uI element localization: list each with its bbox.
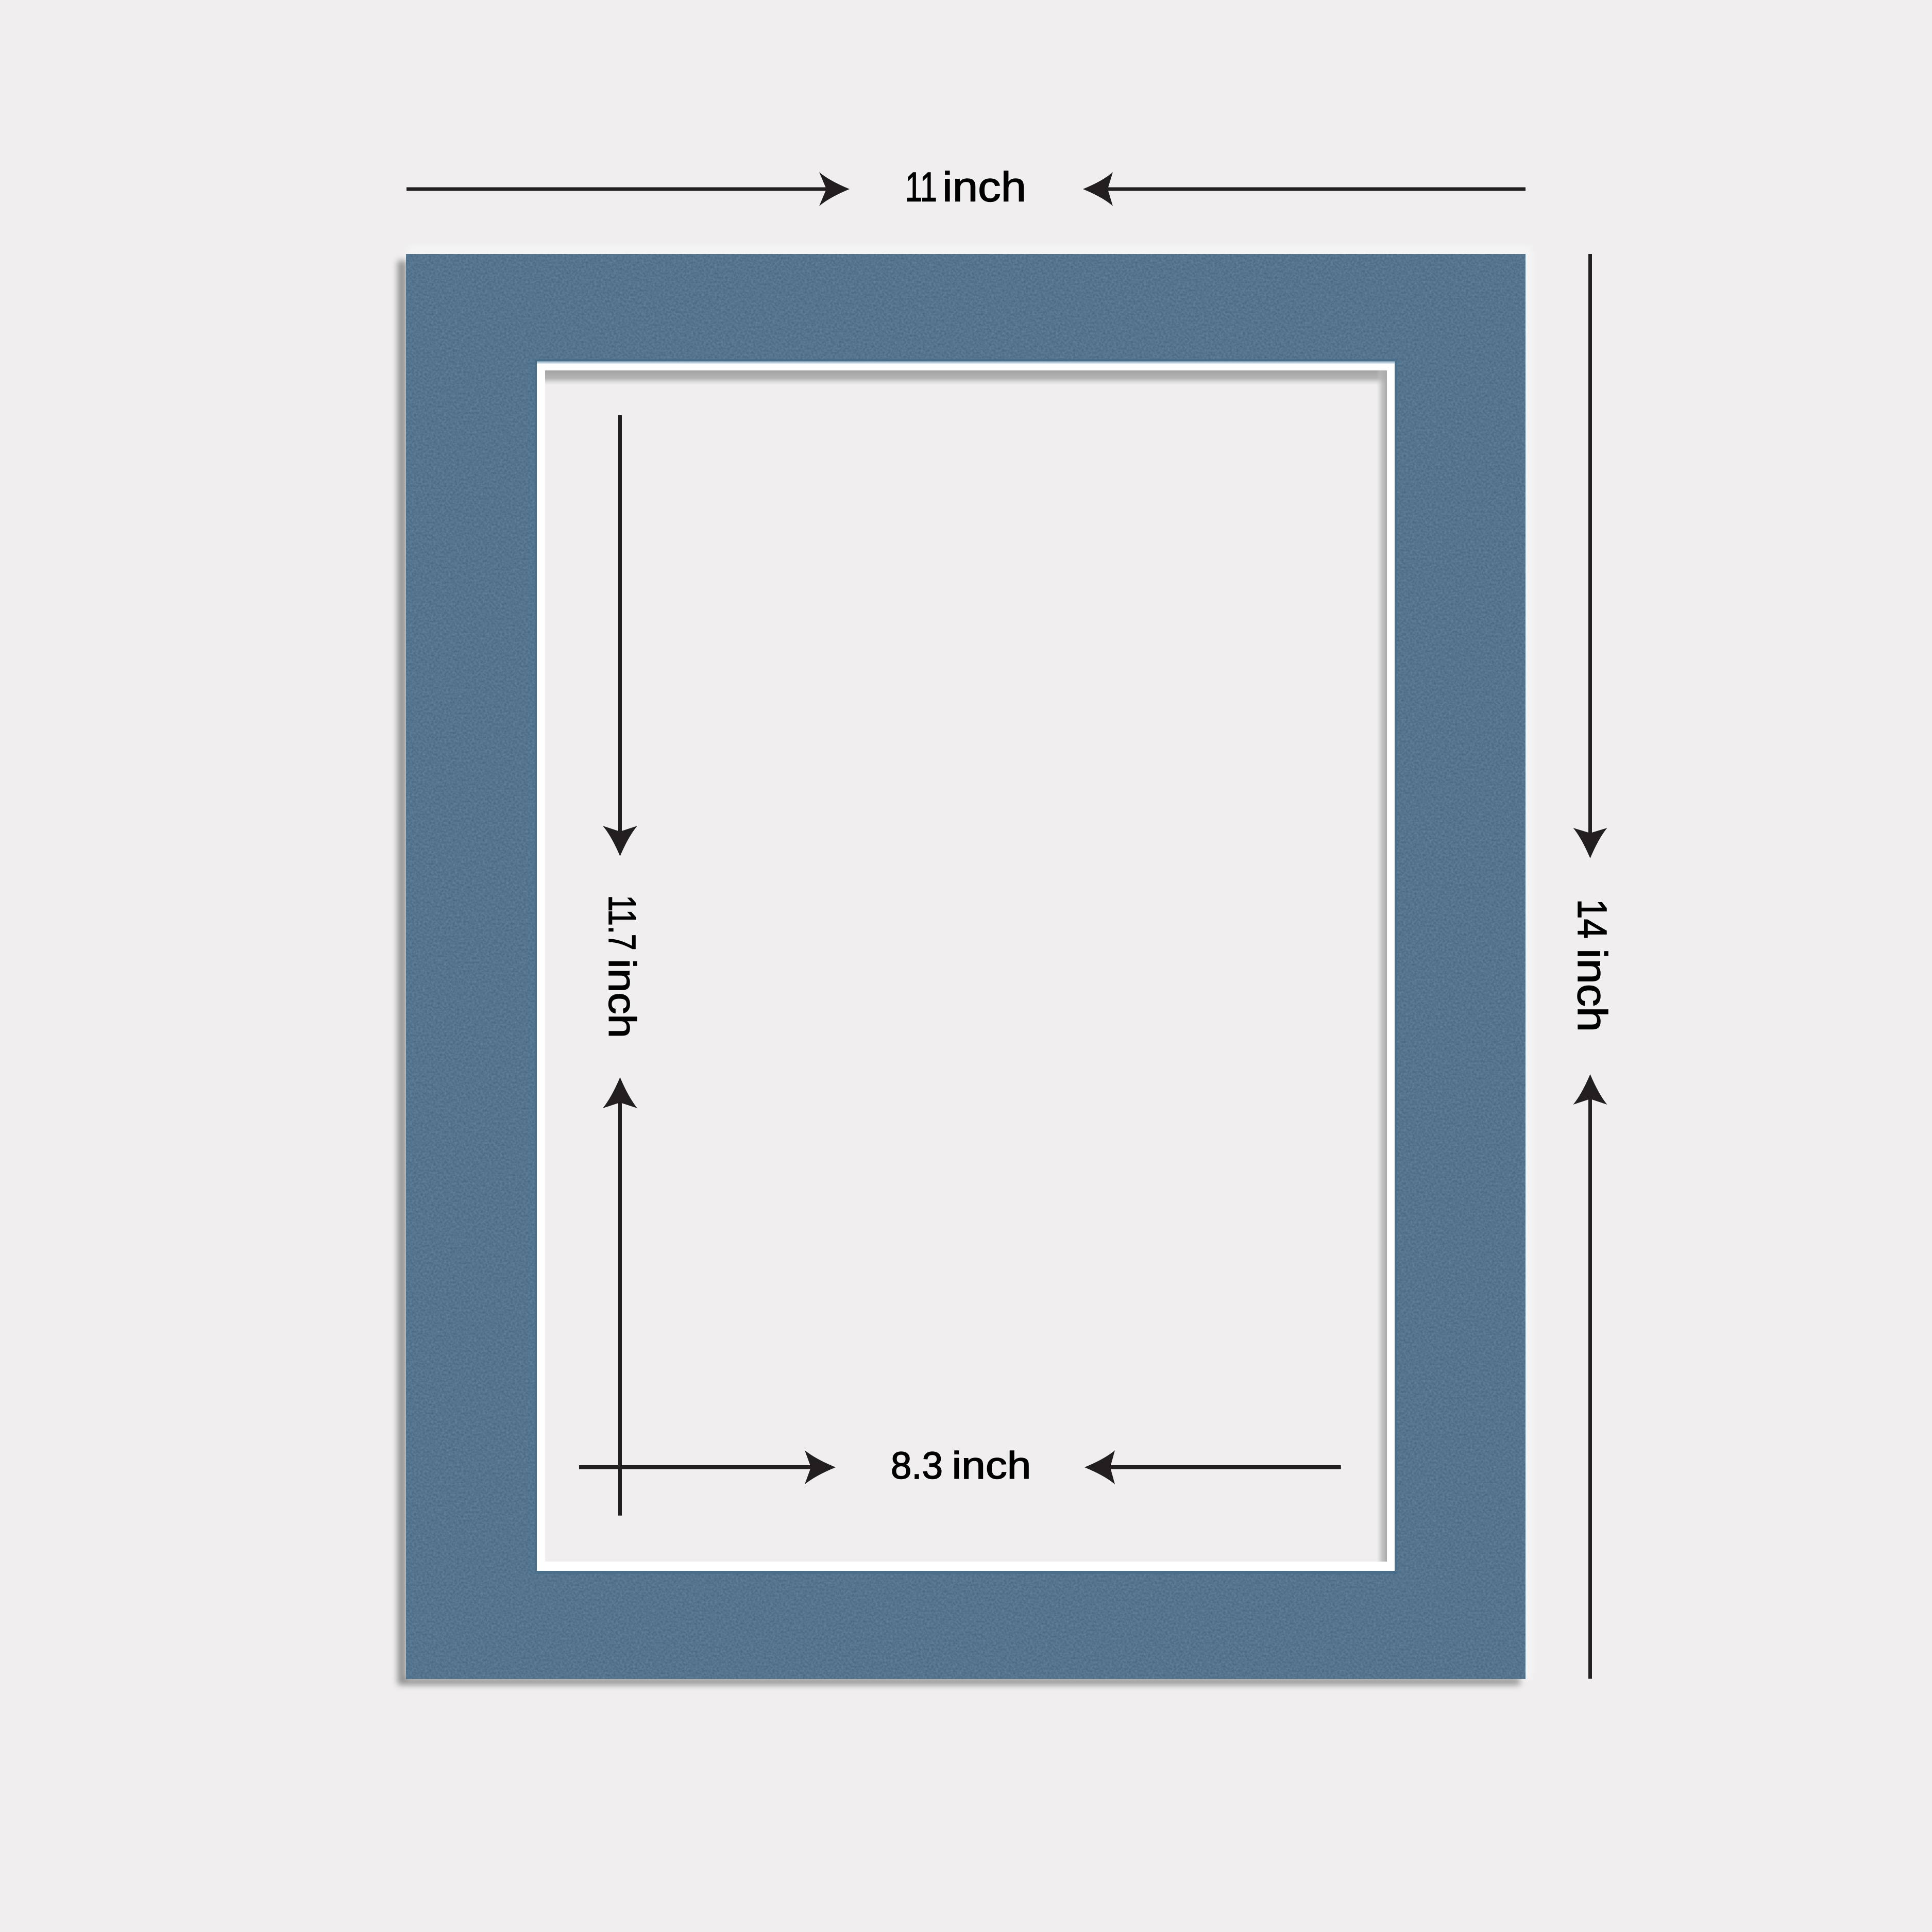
text: 11 inch: inch: [942, 164, 1026, 211]
arrow: opening width left: [579, 1450, 836, 1484]
text: 11 inch: 11: [905, 164, 937, 211]
arrow: opening height bottom: [603, 1077, 637, 1516]
dimension: opening height 11.7 inch: [601, 415, 643, 1516]
arrow: opening height top: [603, 415, 637, 856]
dimension: opening width 8.3 inch: [579, 1444, 1341, 1487]
text: 11.7 inch: inch: [601, 959, 643, 1038]
text: 11.7 inch: 11.7: [601, 895, 643, 950]
text: 14 inch: 14: [1569, 899, 1615, 939]
mat window: white bevel opening: [535, 359, 1397, 1574]
dimension: overall height 14 inch: [1569, 254, 1615, 1679]
text: 14 inch: inch: [1569, 948, 1615, 1032]
arrow: opening width right: [1084, 1450, 1341, 1484]
text: 8.3 inch: inch: [952, 1444, 1031, 1487]
arrow: width right: [1083, 172, 1526, 206]
arrow: height bottom: [1573, 1074, 1607, 1679]
arrow: width left: [406, 172, 850, 206]
panel: blue picture mat: [398, 246, 1532, 1685]
text: 8.3 inch: 8.3: [891, 1444, 943, 1487]
dimension: overall width 11 inch: [406, 164, 1526, 211]
arrow: height top: [1573, 254, 1607, 858]
